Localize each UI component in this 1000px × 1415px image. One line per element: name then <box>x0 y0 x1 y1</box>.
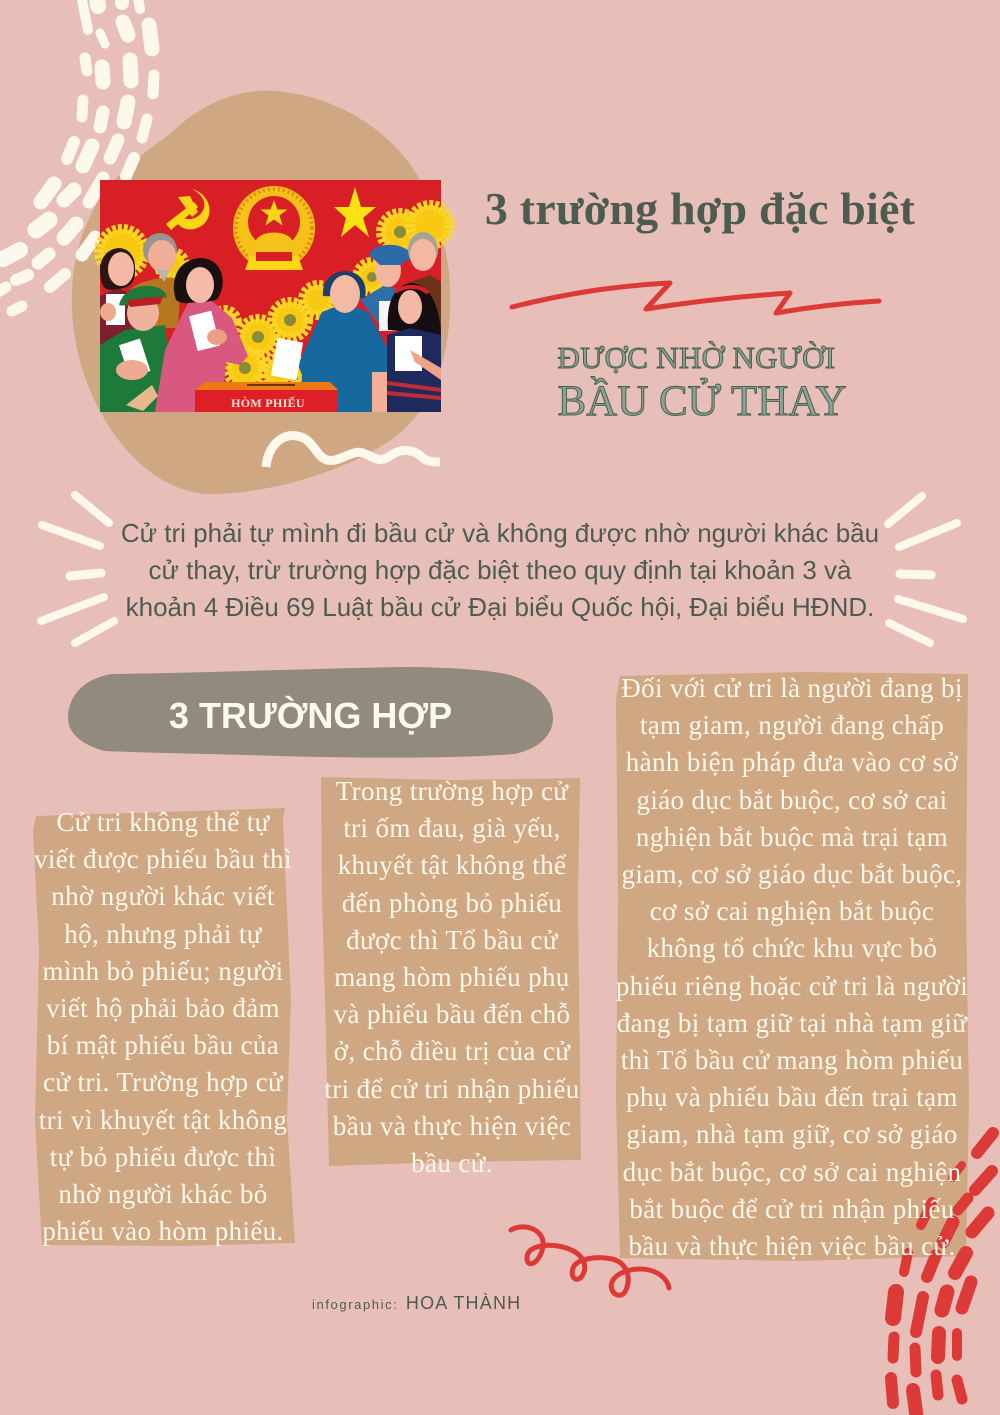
text: case 1: viết được phiếu bầu thì <box>34 844 292 874</box>
text: case 1: nhờ người khác viết <box>51 881 275 911</box>
icon: hammer and sickle <box>166 189 210 230</box>
text: case 2: Trong trường hợp cử <box>336 776 568 806</box>
person: sailor <box>360 245 413 331</box>
text: case 3: bầu và thực hiện việc bầu cử. <box>628 1231 956 1261</box>
text: case 1: tự bỏ phiếu được thì <box>50 1142 276 1172</box>
text: case 2: bầu và thực hiện việc <box>333 1111 571 1141</box>
ballot box <box>195 382 338 412</box>
left sunburst rays <box>41 495 114 643</box>
text: case 2: bầu cử. <box>411 1148 493 1178</box>
text: case 1: viết hộ phải bảo đảm <box>46 993 280 1023</box>
text: case 1: bí mật phiếu bầu của <box>47 1030 279 1060</box>
text: case 3: nghiện bắt buộc mà trại tạm <box>636 822 948 852</box>
subtitle: ĐƯỢC NHỜ NGƯỜI <box>558 340 835 375</box>
text: case 3: giam, cơ sở giáo dục bắt buộc, <box>621 859 963 889</box>
text: case 1 <box>34 807 292 1246</box>
red zigzag divider <box>512 283 879 313</box>
text: case 3: đang bị tạm giữ tại nhà tạm giữ <box>617 1008 967 1038</box>
subtitle: BẦU CỬ THAY <box>557 378 847 425</box>
cream dashes top left <box>0 0 154 311</box>
heading: 3 cases: 3 TRƯỜNG HỢP <box>169 695 452 736</box>
subtitle <box>557 340 847 425</box>
person: woman left <box>100 248 135 360</box>
text: case 2: và phiếu bầu đến chỗ <box>334 999 570 1029</box>
person: old man <box>132 233 181 328</box>
intro paragraph <box>121 518 879 622</box>
text: case 1: hộ, nhưng phải tự <box>64 919 262 949</box>
text: case 3: phiếu riêng hoặc cử tri là người <box>616 971 968 1001</box>
text: case 1: Cử tri không thể tự <box>56 807 270 837</box>
text: case 1: nhờ người khác bỏ <box>58 1179 268 1209</box>
text: case 3: giam, nhà tạm giữ, cơ sở giáo <box>626 1119 958 1149</box>
text: case 2: ở, chỗ điều trị của cử <box>334 1036 570 1066</box>
person: woman in pink ao dai <box>126 258 248 412</box>
text: case 3: giáo dục bắt buộc, cơ sở cai <box>636 785 948 815</box>
text: case 3 <box>616 673 968 1261</box>
intro paragraph: cử thay, trừ trường hợp đặc biệt theo quy định tại khoản 3 và <box>148 555 852 585</box>
text: case 2: khuyết tật không thể <box>338 850 566 880</box>
text: case 2: tri ốm đau, già yếu, <box>343 813 561 843</box>
text: case 1: mình bỏ phiếu; người <box>42 956 284 986</box>
credit: infographic: HOA THÀNH <box>312 1293 521 1313</box>
text: case 3: cơ sở cai nghiện bắt buộc <box>650 896 934 926</box>
text: case 1: tri vì khuyết tật không <box>39 1105 287 1135</box>
text: case 2: tri để cử tri nhận phiếu <box>324 1074 580 1104</box>
tan box: case 1 <box>33 808 295 1246</box>
text: case 1: cử tri. Trường hợp cử <box>43 1067 283 1097</box>
text: case 2 <box>324 776 580 1178</box>
ballot box: HÒM PHIẾU <box>231 395 305 410</box>
grey heading pill <box>68 667 553 758</box>
intro paragraph: khoản 4 Điều 69 Luật bầu cử Đại biểu Quốc hội, Đại biểu HĐND. <box>126 592 874 622</box>
intro paragraph: Cử tri phải tự mình đi bầu cử và không được nhờ người khác bầu <box>121 518 879 548</box>
person: girl with red headband <box>387 283 441 412</box>
text: case 2: đến phòng bỏ phiếu <box>342 888 562 918</box>
text: case 3: phụ và phiếu bầu đến trại tạm <box>626 1082 958 1112</box>
cream squiggle <box>266 436 440 467</box>
person: man in blue <box>271 271 393 412</box>
right sunburst rays <box>888 496 963 643</box>
icon: national emblem <box>233 186 315 270</box>
text: case 3: hành biện pháp đưa vào cơ sở <box>626 747 958 777</box>
illustration: voters at ballot box <box>99 180 450 412</box>
red dashes bottom right <box>891 1133 993 1415</box>
person: soldier <box>100 286 175 412</box>
tan box: case 3 <box>616 672 969 1261</box>
tan blob behind illustration <box>72 91 450 494</box>
text: case 3: không tổ chức khu vực bỏ <box>647 933 937 963</box>
text: case 3: bắt buộc để cử tri nhận phiếu <box>629 1194 955 1224</box>
text: case 3: dục bắt buộc, cơ sở cai nghiện <box>623 1157 961 1187</box>
text: case 3: thì Tổ bầu cử mang hòm phiếu <box>621 1045 963 1075</box>
text: case 3: Đối với cử tri là người đang bị <box>621 673 963 703</box>
icon: sunflowers <box>99 205 450 386</box>
text: case 2: mang hòm phiếu phụ <box>334 962 570 992</box>
tan box: case 2 <box>321 777 581 1166</box>
title: 3 trường hợp đặc biệt <box>485 183 915 234</box>
text: case 1: phiếu vào hòm phiếu. <box>42 1216 284 1246</box>
icon: yellow star <box>334 187 376 237</box>
text: case 2: được thì Tổ bầu cử <box>346 925 558 955</box>
red curly flourish <box>511 1227 669 1295</box>
person: elder right <box>402 232 441 335</box>
text: case 3: tạm giam, người đang chấp <box>640 710 944 740</box>
